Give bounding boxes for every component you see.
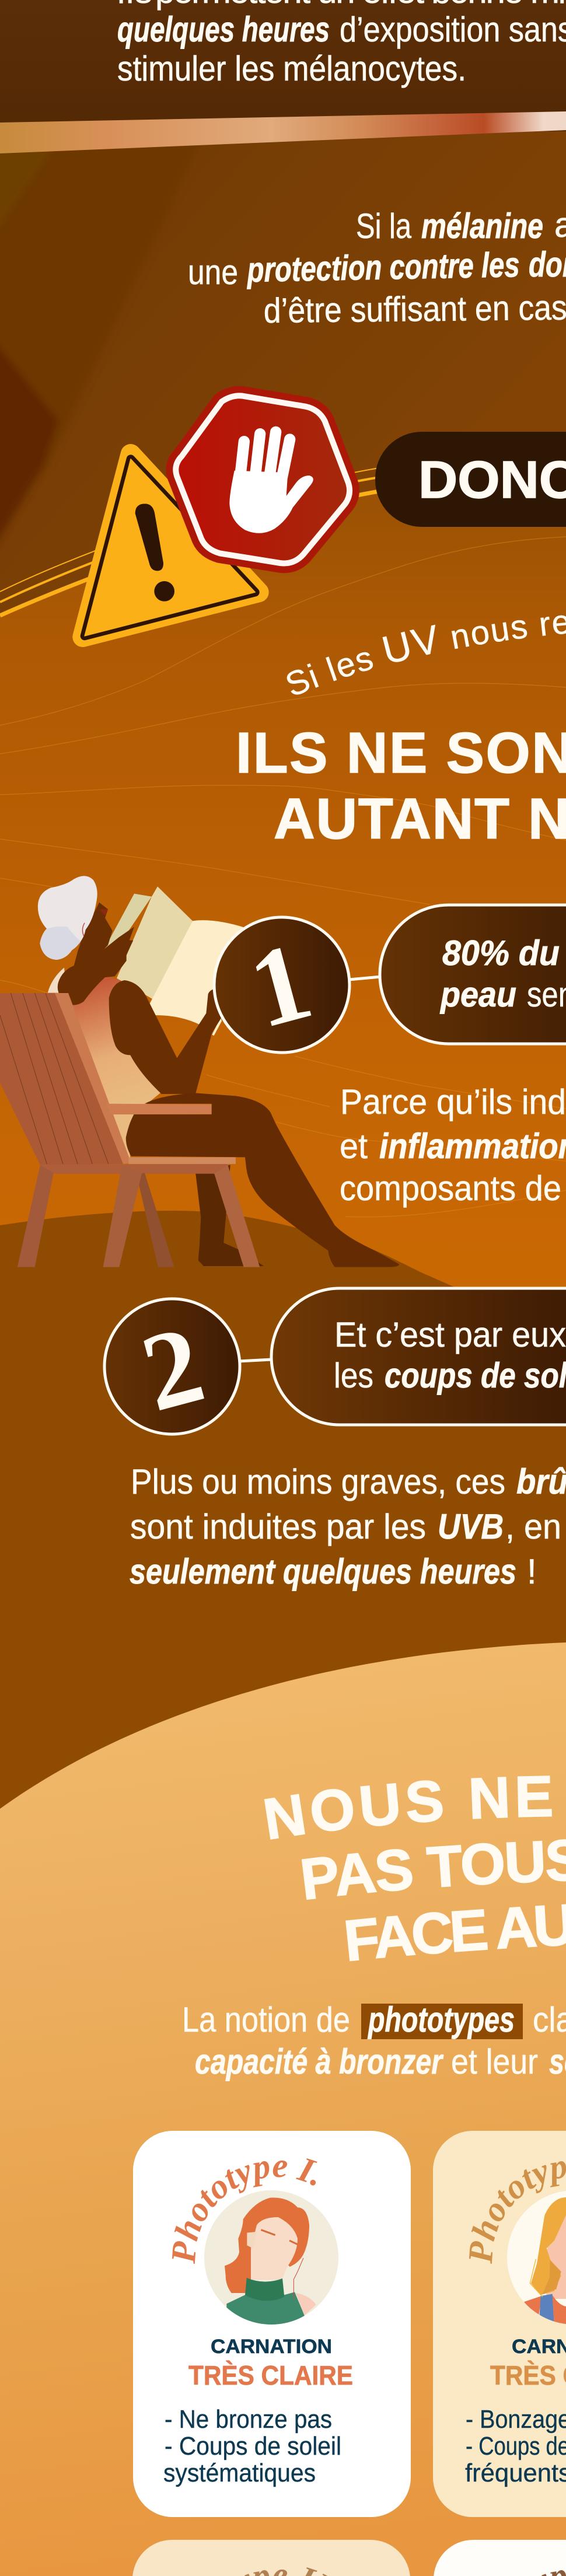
card: phototype I	[133, 2131, 411, 2517]
card list I: - Coups de soleil	[165, 2432, 341, 2460]
card: phototype II	[433, 2131, 566, 2517]
illustration: woman reading on chair	[0, 876, 399, 1267]
text block: brûlures UVB: sont induites par les	[130, 1507, 426, 1546]
text block: brûlures UVB: UVB	[438, 1507, 504, 1546]
text block: intro end: quelques heures	[117, 10, 330, 49]
text block: brûlures UVB: Plus ou moins graves, ces	[131, 1462, 505, 1501]
portrait I	[204, 2190, 338, 2326]
pill 1: 80%: 80% du	[442, 934, 560, 973]
curved subtitle: Si les UV nous re	[287, 615, 566, 694]
number circle 1: 1	[238, 919, 323, 1052]
number circle 1	[214, 917, 350, 1053]
text block: notion de phototypes: phototypes	[367, 2000, 515, 2039]
main heading: ILS NE SONT AUTANT: ILS NE SON	[236, 721, 566, 785]
text block: mélanine	[188, 205, 566, 330]
diagonal metallic band	[0, 111, 566, 153]
pill: DONC	[375, 432, 566, 527]
pill 2: coups de soleil: les	[334, 1356, 373, 1395]
middle orange background	[0, 455, 566, 1342]
icon: warning triangle	[83, 454, 258, 637]
upper brown background	[0, 145, 201, 543]
card labels I: CARNATION	[211, 2336, 332, 2358]
text block: notion de phototypes: capacité à bronzer	[195, 2042, 444, 2081]
text block: brûlures UVB	[130, 1462, 566, 1591]
lower light orange panel	[0, 1642, 566, 2576]
text block: mélanine: Si la	[356, 207, 412, 246]
card title I: Phototype I.	[172, 2158, 317, 2264]
number circle 2: 2	[130, 1302, 215, 1435]
text block: notion de phototypes	[182, 2000, 566, 2081]
main heading: ILS NE SONT AUTANT	[236, 721, 566, 851]
connector 1	[349, 977, 380, 980]
icon: stop hand sign	[176, 396, 350, 564]
card list I: systématiques	[163, 2459, 316, 2487]
card list I: - Ne bronze pas	[165, 2405, 332, 2434]
book	[101, 886, 245, 1036]
legs	[126, 1093, 399, 1267]
pill 2: coups de soleil	[271, 1288, 566, 1425]
text block: intro end: stimuler les mélanocytes.	[117, 49, 466, 88]
text block: brûlures UVB: , en	[505, 1507, 561, 1546]
main heading: ILS NE SONT AUTANT: AUTANT	[274, 787, 509, 851]
card: phototype I: TRÈS CLAIRE	[188, 2360, 353, 2390]
text block: mélanine: une	[188, 253, 238, 292]
connector 2	[239, 1359, 272, 1361]
chair	[0, 993, 260, 1267]
ground hill	[0, 1211, 566, 1867]
text block: intro end	[117, 0, 566, 88]
top dark brown panel	[0, 0, 566, 131]
thin wave lines	[0, 537, 566, 1217]
text block: notion de phototypes: et leur	[451, 2042, 538, 2081]
card: phototype III	[132, 2540, 410, 2576]
curved heading: NOUS NE PAS TOUS FACE AU	[264, 1775, 566, 1962]
text block: Parce qu'ils: et	[340, 1127, 368, 1166]
curved heading: NOUS NE PAS TOUS FACE AU: NOUS NE	[264, 1775, 552, 1840]
text block: notion de phototypes: La notion de	[182, 2000, 350, 2039]
body	[48, 903, 222, 1163]
pill 1: 80%: peau	[439, 975, 516, 1014]
portrait II	[507, 2190, 566, 2326]
towel on hair	[38, 876, 108, 960]
text block: brûlures UVB: !	[527, 1552, 537, 1591]
pill 1: 80%	[380, 905, 566, 1044]
card list I	[163, 2405, 341, 2487]
text block: Parce qu'ils	[340, 1082, 566, 1208]
number circle 2	[104, 1299, 240, 1435]
decorative yellow lines to signs	[0, 468, 379, 616]
card list II	[465, 2405, 566, 2487]
